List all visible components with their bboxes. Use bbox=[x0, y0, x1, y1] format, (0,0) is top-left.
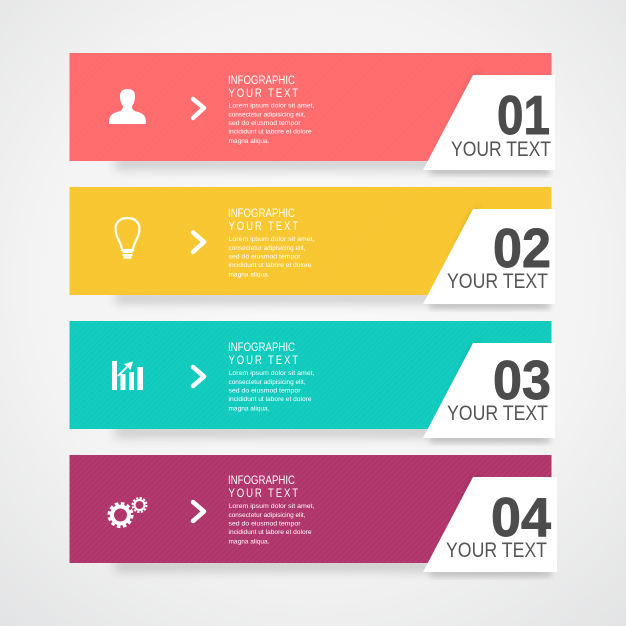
subheading 02: YOUR TEXT bbox=[228, 220, 298, 233]
number 01: 01 bbox=[497, 84, 550, 146]
banner shadow 01 bbox=[115, 157, 545, 170]
body text 03: consectetur adipisicing elit, bbox=[228, 379, 306, 386]
body text 03: magna aliqua. bbox=[228, 406, 270, 412]
number 03: 03 bbox=[493, 349, 551, 411]
body text 01: sed do eiusmod tempor bbox=[228, 120, 301, 127]
subheading 01: YOUR TEXT bbox=[228, 87, 298, 100]
tag 03 bbox=[423, 343, 555, 438]
banner shadow 04 bbox=[115, 559, 545, 572]
tag shadow 01 bbox=[438, 69, 481, 150]
body text 01: consectetur adipisicing elit, bbox=[228, 112, 306, 118]
icon: bar chart bbox=[112, 361, 143, 390]
icon: arrow bbox=[193, 502, 204, 521]
tag bottom shadow 04 bbox=[430, 570, 552, 577]
subheading 03: YOUR TEXT bbox=[228, 354, 298, 367]
body text 03: Lorem ipsum dolor sit amet, bbox=[228, 370, 315, 377]
icon: gears bbox=[109, 498, 146, 526]
heading 02: INFOGRAPHIC bbox=[228, 208, 295, 220]
banner body 01 bbox=[70, 53, 552, 161]
panel: banner 02 bbox=[70, 187, 555, 309]
body text 02 bbox=[228, 236, 315, 278]
number 04: 04 bbox=[491, 486, 551, 548]
body text 04: sed do eiusmod tempor bbox=[228, 520, 301, 528]
body text 02: sed do eiusmod tempor bbox=[228, 254, 301, 260]
heading 03: INFOGRAPHIC bbox=[228, 342, 295, 354]
number 02: 02 bbox=[493, 217, 551, 279]
panel: banner 01 bbox=[70, 53, 555, 175]
body text 02: magna aliqua. bbox=[228, 272, 270, 278]
label 04: YOUR TEXT bbox=[446, 538, 547, 562]
body text 02: Lorem ipsum dolor sit amet, bbox=[228, 236, 315, 243]
banner body 02 bbox=[70, 187, 552, 295]
tag shadow 02 bbox=[438, 203, 481, 284]
body text 03: incididunt ut labore et dolore bbox=[228, 396, 312, 403]
body text 04: magna aliqua. bbox=[228, 538, 270, 546]
label 01: YOUR TEXT bbox=[451, 137, 551, 161]
panel: banner 03 bbox=[70, 321, 555, 443]
body text 03 bbox=[228, 370, 315, 412]
body text 02: incididunt ut labore et dolore bbox=[228, 262, 312, 269]
label 02: YOUR TEXT bbox=[447, 269, 548, 293]
tag 02 bbox=[423, 209, 555, 304]
body text 01: magna aliqua. bbox=[228, 138, 270, 145]
icon: arrow bbox=[193, 99, 204, 118]
tag bottom shadow 01 bbox=[430, 168, 550, 175]
heading 04: INFOGRAPHIC bbox=[228, 475, 295, 487]
banner shadow 03 bbox=[115, 425, 545, 438]
tag 04 bbox=[423, 477, 557, 572]
label 03: YOUR TEXT bbox=[447, 401, 548, 425]
icon: person bbox=[109, 89, 146, 124]
body text 03: sed do eiusmod tempor bbox=[228, 388, 301, 394]
heading 01: INFOGRAPHIC bbox=[228, 75, 295, 87]
banner shadow 02 bbox=[115, 291, 545, 304]
tag bottom shadow 03 bbox=[430, 436, 550, 443]
banner body 03 bbox=[70, 321, 552, 429]
tag bottom shadow 02 bbox=[430, 302, 550, 309]
body text 04: incididunt ut labore et dolore bbox=[228, 529, 312, 536]
icon: arrow bbox=[193, 367, 204, 386]
body text 04: Lorem ipsum dolor sit amet, bbox=[228, 503, 315, 510]
tag shadow 04 bbox=[438, 471, 481, 552]
tag 01 bbox=[423, 75, 555, 170]
body text 01: incididunt ut labore et dolore bbox=[228, 128, 312, 136]
icon: light bulb bbox=[116, 218, 140, 258]
body text 01: Lorem ipsum dolor sit amet, bbox=[228, 102, 315, 110]
body text 04: consectetur adipisicing elit, bbox=[228, 512, 306, 519]
body text 01 bbox=[228, 102, 315, 145]
banner body 04 bbox=[70, 455, 552, 563]
tag shadow 03 bbox=[438, 337, 481, 418]
body text 02: consectetur adipisicing elit, bbox=[228, 245, 306, 252]
panel: banner 04 bbox=[70, 455, 557, 577]
icon: arrow bbox=[193, 232, 204, 252]
subheading 04: YOUR TEXT bbox=[228, 487, 298, 500]
body text 04 bbox=[228, 503, 315, 546]
